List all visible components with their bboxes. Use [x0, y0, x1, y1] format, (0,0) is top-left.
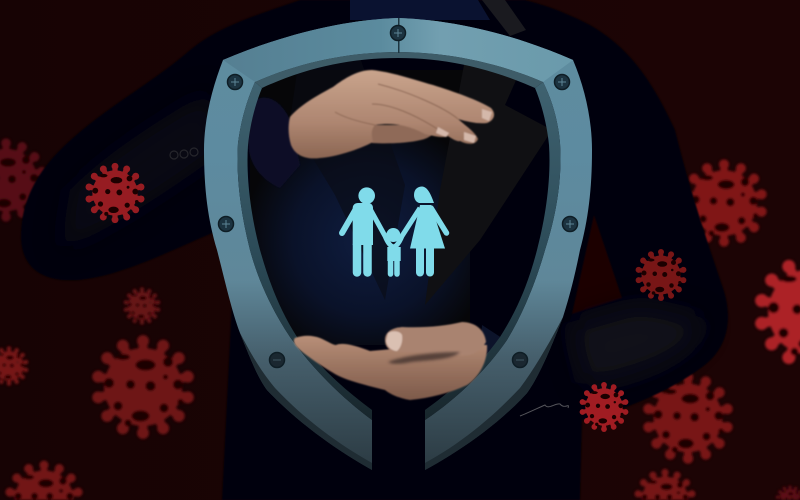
rivet mid left — [218, 216, 234, 232]
father — [342, 187, 375, 272]
rivet mid right — [562, 216, 578, 232]
virus: lower left small — [123, 287, 161, 325]
virus in front: on right sleeve — [635, 249, 687, 301]
child — [386, 228, 401, 274]
virus: lower right — [642, 372, 734, 464]
blue cuff — [248, 98, 300, 188]
rivet top — [390, 26, 406, 40]
virus: large lower left — [91, 335, 195, 439]
shield lower outer dark edge left — [240, 333, 372, 470]
virus in front: lower right sleeve — [579, 382, 629, 432]
sleeve shading — [60, 90, 225, 250]
sleeve buttons — [170, 148, 198, 159]
right lower cuff — [478, 325, 505, 385]
shield top bevel — [255, 52, 543, 88]
right lapel — [425, 60, 552, 305]
palm underside — [370, 125, 450, 143]
palm shadow — [388, 352, 460, 364]
virus: far left — [0, 138, 48, 222]
rivet upper right — [554, 74, 570, 90]
thumbnail — [386, 331, 402, 351]
sweater under suit — [250, 70, 470, 345]
shield outer rim — [204, 18, 592, 470]
virus: bottom left — [4, 460, 84, 500]
shield — [204, 18, 592, 470]
shirt at collar — [350, 0, 490, 20]
rivets — [218, 26, 578, 368]
sleeve signature mark — [520, 404, 568, 416]
rivet upper left — [228, 74, 242, 90]
shield centre seam — [398, 18, 400, 53]
virus: right edge — [754, 255, 800, 369]
rivet lower left — [270, 352, 284, 368]
virus: bottom right — [634, 469, 696, 500]
family icon — [342, 186, 446, 274]
finger creases — [335, 84, 458, 136]
shield left inner bevel — [238, 82, 372, 420]
virus: bottom corner — [775, 485, 800, 500]
right lower sleeve shading — [570, 305, 705, 385]
shield right inner bevel — [425, 82, 560, 420]
virus in front: upper left on sleeve — [85, 163, 145, 223]
right collar — [482, 0, 526, 36]
palm — [294, 336, 487, 400]
viruses behind the figure — [0, 138, 800, 500]
left lapel — [290, 52, 405, 300]
virus: right upper — [680, 159, 768, 247]
upper hand — [289, 70, 494, 158]
mother — [410, 186, 446, 272]
lower hand — [294, 322, 487, 400]
thumb and wrist — [385, 322, 486, 356]
rivet lower right — [512, 352, 528, 368]
arm gap on right — [572, 215, 622, 314]
shield lower outer dark edge right — [425, 317, 563, 470]
shield top highlight — [223, 18, 573, 82]
linked arms — [369, 207, 420, 247]
virus: left edge — [0, 346, 29, 386]
fingernails — [436, 109, 492, 143]
hand back and fingers — [289, 70, 494, 158]
